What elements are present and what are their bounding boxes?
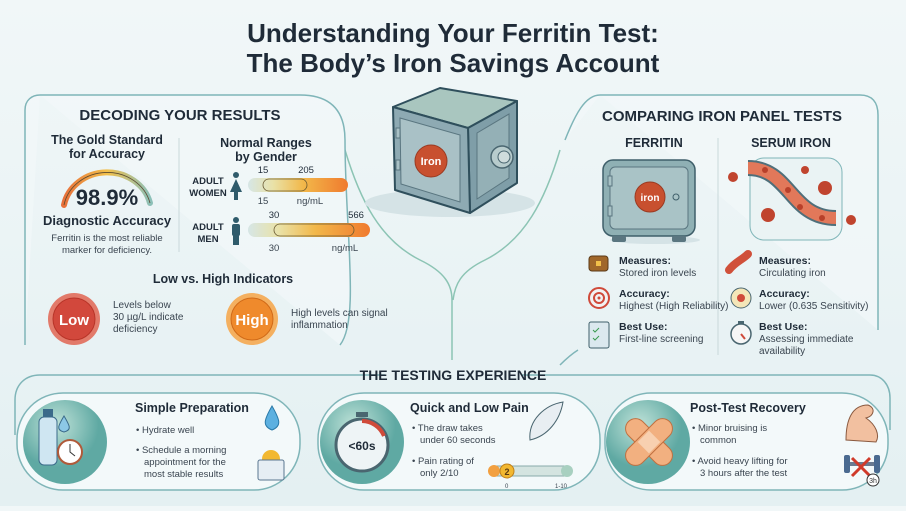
card: simple preparation: most stable results bbox=[144, 469, 223, 480]
title bbox=[247, 18, 660, 78]
normal ranges chart: Normal Ranges bbox=[220, 136, 312, 150]
serum iron details: Best Use: bbox=[759, 321, 807, 333]
icon: arm bruise bbox=[846, 405, 878, 442]
panel: decoding your results bbox=[25, 95, 388, 345]
card: quick and low pain bbox=[318, 393, 600, 490]
normal ranges chart bbox=[189, 136, 370, 254]
card: simple preparation: • Schedule a morning bbox=[136, 445, 226, 456]
normal ranges chart: ADULT bbox=[192, 176, 224, 187]
high indicator: High bbox=[235, 312, 269, 329]
card: simple preparation: • Hydrate well bbox=[136, 425, 194, 436]
card: quick and low pain: only 2/10 bbox=[420, 468, 459, 479]
heading: testing experience: THE TESTING EXPERIENCE bbox=[360, 367, 546, 383]
gold standard block: marker for deficiency. bbox=[62, 245, 152, 256]
card: simple preparation bbox=[17, 393, 300, 490]
pain scale bbox=[488, 464, 573, 490]
normal ranges chart: 30 bbox=[269, 243, 279, 254]
icon: ferritin safe bbox=[603, 160, 700, 244]
panel: the testing experience bbox=[15, 367, 890, 490]
panel: comparing iron panel tests: SERUM IRON bbox=[751, 136, 831, 150]
card: simple preparation: Simple Preparation bbox=[135, 401, 249, 415]
connector lines bbox=[345, 150, 560, 360]
card: post-test recovery: • Avoid heavy lifting for bbox=[692, 456, 788, 467]
low indicator: 30 µg/L indicate bbox=[113, 312, 184, 323]
icon: ferritin safe: iron bbox=[641, 193, 659, 204]
panel: comparing iron panel tests: FERRITIN bbox=[625, 136, 683, 150]
icon: central safe: Iron bbox=[421, 156, 442, 168]
pain scale: 2 bbox=[504, 467, 510, 477]
ferritin details: Measures: bbox=[619, 255, 671, 267]
ferritin details: First-line screening bbox=[619, 334, 703, 345]
low indicator: deficiency bbox=[113, 324, 157, 335]
card: post-test recovery: • Minor bruising is bbox=[692, 423, 767, 434]
gold standard block: Diagnostic Accuracy bbox=[43, 213, 172, 228]
normal ranges chart: 205 bbox=[298, 165, 314, 176]
serum iron details: Lower (0.635 Sensitivity) bbox=[759, 301, 868, 312]
card: simple preparation: appointment for the bbox=[144, 457, 226, 468]
gold standard block: for Accuracy bbox=[69, 147, 145, 161]
card: post-test recovery: 3 hours after the test bbox=[700, 468, 787, 479]
icon: dumbbell crossed: 3h bbox=[869, 478, 877, 485]
icon: serum iron pipe bbox=[728, 158, 856, 240]
icon: central safe bbox=[365, 88, 535, 217]
normal ranges chart: ng/mL bbox=[332, 243, 358, 254]
normal ranges chart: 15 bbox=[258, 165, 268, 176]
low vs high heading: Low vs. High Indicators bbox=[153, 272, 293, 286]
icon: dumbbell crossed bbox=[844, 455, 880, 486]
gold standard block: 98.9% bbox=[76, 185, 138, 210]
normal ranges chart: 15 bbox=[258, 196, 268, 207]
high indicator bbox=[226, 293, 388, 345]
serum iron details: Circulating iron bbox=[759, 268, 826, 279]
ferritin details: Highest (High Reliability) bbox=[619, 301, 728, 312]
normal ranges chart: 566 bbox=[348, 210, 364, 221]
panel: comparing iron panel tests bbox=[560, 95, 878, 365]
ferritin details: Accuracy: bbox=[619, 288, 670, 300]
card: quick and low pain: • Pain rating of bbox=[412, 456, 474, 467]
normal ranges chart: MEN bbox=[197, 234, 219, 245]
card: quick and low pain: Quick and Low Pain bbox=[410, 401, 529, 415]
card: quick and low pain: <60s bbox=[348, 439, 376, 453]
ferritin details bbox=[589, 255, 728, 348]
gold standard block: Ferritin is the most reliable bbox=[51, 233, 163, 244]
low indicator: Low bbox=[59, 312, 89, 329]
card: quick and low pain: • The draw takes bbox=[412, 423, 483, 434]
card: post-test recovery: common bbox=[700, 435, 736, 446]
ferritin details: Best Use: bbox=[619, 321, 667, 333]
heading: comparing: COMPARING IRON PANEL TESTS bbox=[602, 108, 842, 125]
low indicator: Levels below bbox=[113, 300, 172, 311]
icon: feather bbox=[530, 402, 563, 440]
serum iron details: Measures: bbox=[759, 255, 811, 267]
normal ranges chart: ng/mL bbox=[297, 196, 323, 207]
title: Understanding Your Ferritin Test: bbox=[247, 18, 659, 48]
card: post-test recovery: Post-Test Recovery bbox=[690, 401, 806, 415]
icon: bandages bbox=[621, 414, 677, 470]
normal ranges chart: by Gender bbox=[235, 150, 297, 164]
card: post-test recovery bbox=[605, 393, 888, 490]
icon: sun calendar bbox=[258, 450, 284, 480]
serum iron details: Assessing immediate bbox=[759, 334, 854, 345]
card: quick and low pain: under 60 seconds bbox=[420, 435, 496, 446]
pain scale: 0 bbox=[505, 484, 509, 490]
gold standard block: The Gold Standard bbox=[51, 133, 163, 147]
normal ranges chart: ADULT bbox=[192, 222, 224, 233]
high indicator: inflammation bbox=[291, 320, 348, 331]
serum iron details: Accuracy: bbox=[759, 288, 810, 300]
normal ranges chart: WOMEN bbox=[189, 188, 227, 199]
serum iron details: availability bbox=[759, 346, 805, 357]
title: The Body’s Iron Savings Account bbox=[247, 48, 660, 78]
serum iron details bbox=[729, 254, 868, 357]
ferritin details: Stored iron levels bbox=[619, 268, 696, 279]
pain scale: 1-10 bbox=[555, 484, 568, 490]
high indicator: High levels can signal bbox=[291, 308, 388, 319]
low indicator bbox=[48, 293, 184, 345]
heading: decoding: DECODING YOUR RESULTS bbox=[79, 107, 281, 124]
icon: water drop bbox=[265, 406, 279, 430]
gold standard block bbox=[43, 133, 172, 256]
normal ranges chart: 30 bbox=[269, 210, 279, 221]
